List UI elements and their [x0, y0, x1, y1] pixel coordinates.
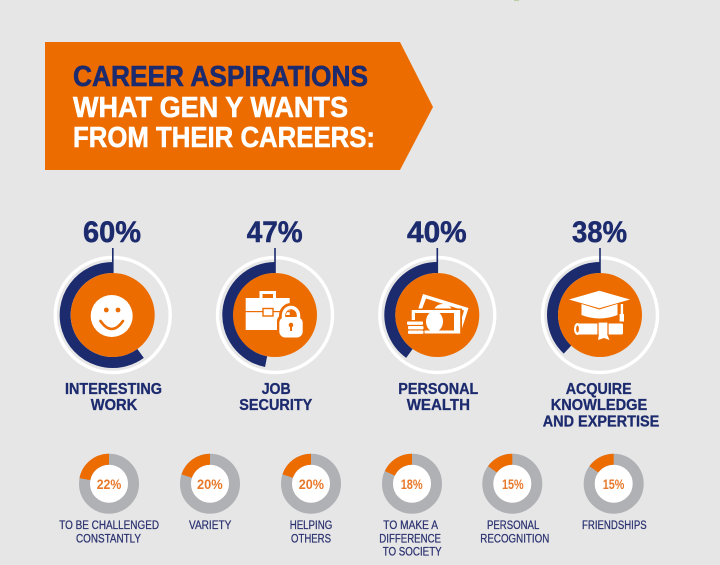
donut: friendships 15%: FRIENDSHIPS — [582, 520, 647, 532]
donut: to be challenged constantly 22% — [59, 459, 159, 545]
panel: acquire knowledge and expertise 38%: 38% — [572, 216, 627, 249]
panel: personal wealth 40%: 40% — [407, 216, 467, 249]
donut: friendships 15% — [582, 459, 647, 532]
donut: helping others 20% — [286, 459, 336, 545]
title banner: CAREER ASPIRATIONS — [73, 61, 368, 93]
panel: interesting work 60%: 60% — [83, 216, 141, 249]
donut: helping others 20%: HELPING — [290, 520, 332, 532]
panel: job security 47%: 47% — [247, 216, 303, 249]
donut: to make a difference to society 18% — [379, 459, 442, 559]
donut: friendships 15%: 15% — [603, 477, 624, 492]
title banner: FROM THEIR CAREERS: — [73, 122, 375, 154]
donut: personal recognition 15%: 15% — [502, 477, 524, 492]
panel: job security 47%: SECURITY — [239, 397, 313, 414]
panel: acquire knowledge and expertise 38% — [542, 216, 660, 430]
panel: personal wealth 40%: WEALTH — [407, 397, 470, 414]
panel: interesting work 60%: WORK — [91, 397, 138, 414]
donut: to be challenged constantly 22%: CONSTANTLY — [76, 533, 141, 545]
panel: job security 47% — [218, 216, 332, 414]
panel: personal wealth 40% — [380, 216, 495, 414]
panel: personal wealth 40%: PERSONAL — [398, 381, 478, 398]
donut: variety 20%: 20% — [197, 477, 223, 492]
donut: variety 20%: VARIETY — [189, 520, 232, 532]
donut: to be challenged constantly 22%: TO BE CHALLENGED — [59, 520, 159, 532]
title banner: WHAT GEN Y WANTS — [73, 92, 348, 124]
donut: to make a difference to society 18%: DIFFERENCE — [379, 533, 441, 545]
panel: interesting work 60%: INTERESTING — [65, 381, 162, 398]
icon: smiley face — [91, 295, 133, 337]
donut: variety 20% — [186, 459, 234, 532]
panel: job security 47%: JOB — [262, 381, 291, 398]
donut: to make a difference to society 18%: TO MAKE A — [383, 520, 438, 532]
icon: briefcase with padlock — [246, 291, 305, 340]
donut: to make a difference to society 18%: 18% — [401, 477, 423, 492]
donut: to be challenged constantly 22%: 22% — [97, 477, 121, 492]
donut: helping others 20%: OTHERS — [291, 533, 331, 545]
panel: interesting work 60% — [55, 216, 170, 414]
icon: graduation cap and diploma — [567, 290, 632, 340]
icon: banknotes and coins — [406, 294, 468, 336]
panel: acquire knowledge and expertise 38%: AND EXPERTISE — [543, 414, 660, 430]
donut: personal recognition 15%: PERSONAL — [487, 520, 540, 532]
title banner — [45, 42, 433, 170]
panel: acquire knowledge and expertise 38%: ACQUIRE — [566, 381, 632, 398]
donut: to make a difference to society 18%: TO SOCIETY — [383, 547, 442, 559]
donut: personal recognition 15% — [480, 459, 549, 545]
donut: helping others 20%: 20% — [299, 477, 324, 492]
panel: acquire knowledge and expertise 38%: KNOWLEDGE — [551, 397, 648, 414]
donut: personal recognition 15%: RECOGNITION — [480, 533, 549, 545]
